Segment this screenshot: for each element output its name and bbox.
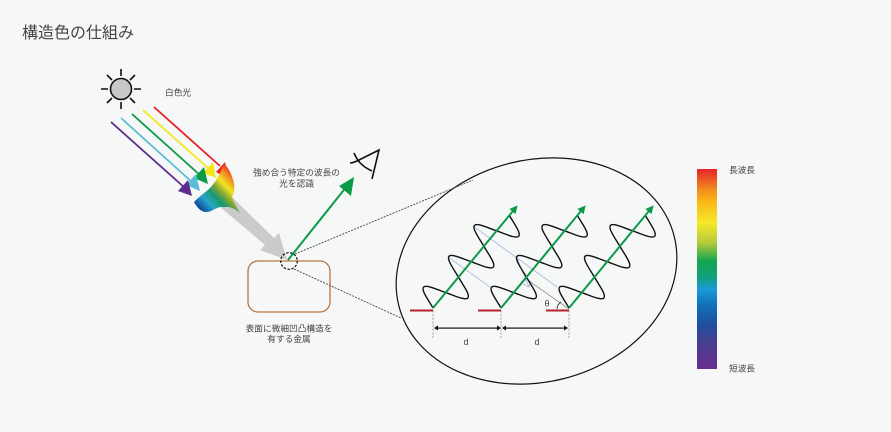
icon: sun <box>101 69 141 109</box>
spectrum bar <box>697 169 717 369</box>
dashed leader: upper <box>295 180 473 254</box>
arrow: cyan ray <box>121 118 200 191</box>
wave 3 <box>553 192 669 321</box>
label: theta: θ <box>544 298 550 308</box>
wave 2 <box>485 192 601 321</box>
dashed circle <box>281 253 297 269</box>
arrow: grey light beam to surface <box>220 197 287 260</box>
dashed leader: lower <box>294 269 401 318</box>
theta arc <box>557 302 561 309</box>
label: d left: d <box>463 337 469 347</box>
label: recognised wavelength: 強め合う特定の波長の <box>253 168 340 178</box>
prism: spectrum fan <box>194 164 240 213</box>
label: d right: d <box>534 337 540 347</box>
label: metal with micro relief: 有する金属 <box>267 333 311 344</box>
label: white light: 白色光 <box>165 86 191 98</box>
panel: metal surface <box>248 261 330 312</box>
wave 1 <box>417 192 533 321</box>
label: recognised wavelength: 光を認識 <box>279 178 314 188</box>
red surface ticks <box>410 310 569 312</box>
arrow: red ray <box>154 107 229 179</box>
arrow: yellow ray <box>143 110 216 178</box>
dimension arrows <box>434 326 568 330</box>
arrow: reflected green light <box>288 177 354 260</box>
title: 構造色の仕組み <box>22 24 134 42</box>
label: metal with micro relief: 表面に微細凹凸構造を <box>246 324 332 334</box>
label: long wavelength: 長波長 <box>729 164 755 175</box>
grey baseline to theta <box>529 281 569 309</box>
arrow: purple ray <box>111 122 192 196</box>
arrow: green ray <box>132 114 208 184</box>
label: short wavelength: 短波長 <box>729 362 755 374</box>
grey vertical guides <box>433 310 569 338</box>
panel: magnified ellipse <box>372 129 701 413</box>
optical path lines <box>448 226 557 287</box>
icon: eye <box>350 150 379 179</box>
